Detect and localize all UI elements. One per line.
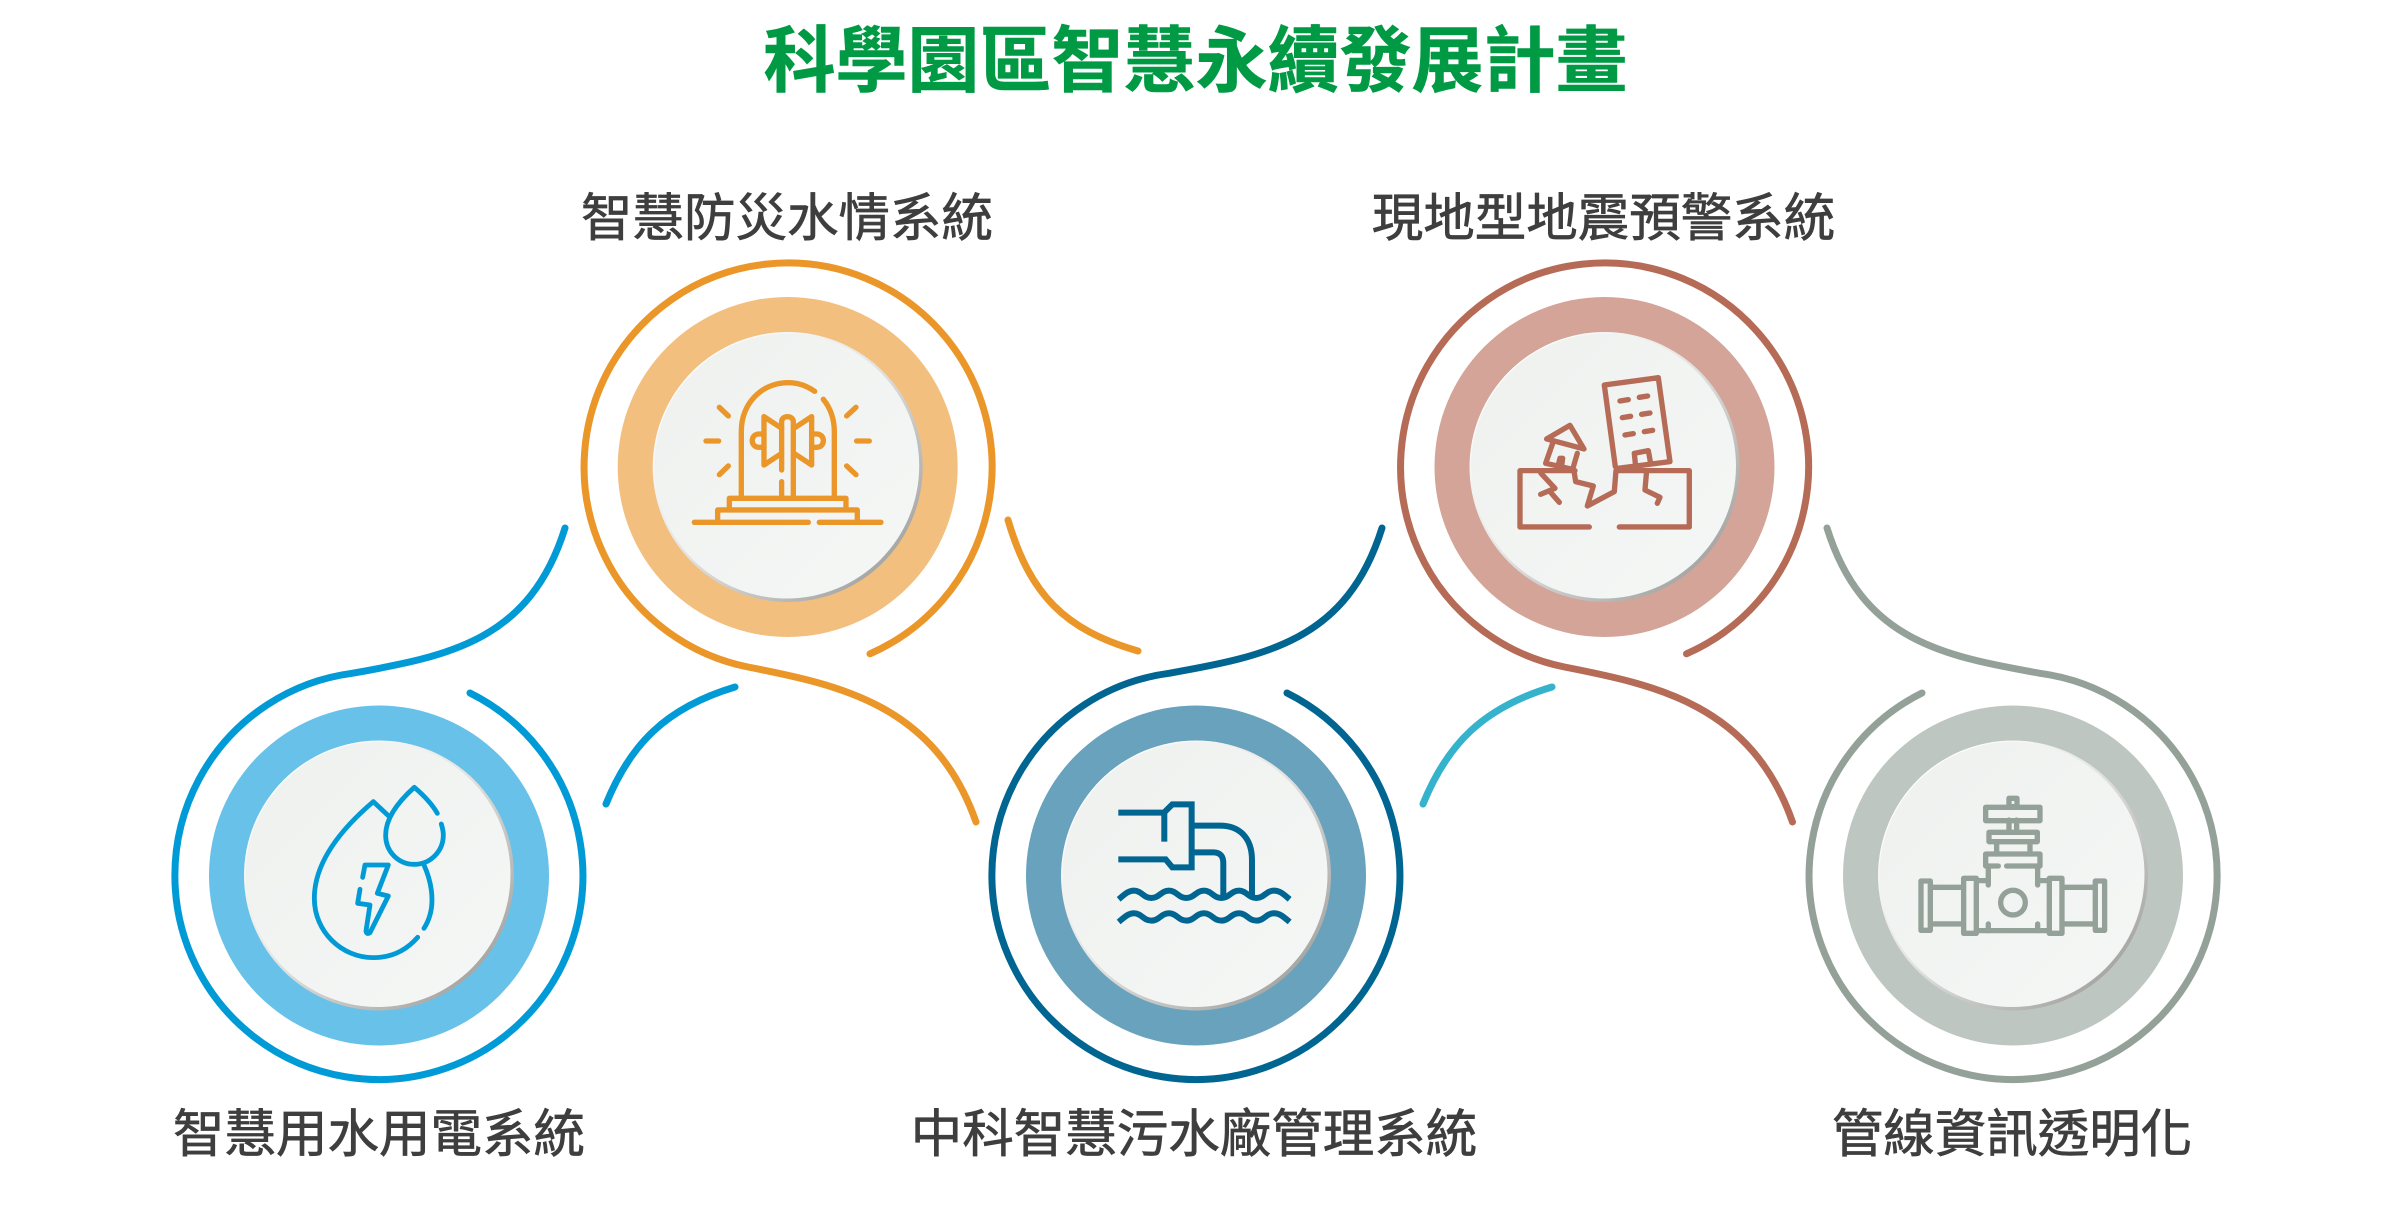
ring: gray (1843, 706, 2183, 1046)
icon: water drop with lightning bolt (314, 787, 443, 958)
disc (1470, 332, 1740, 602)
ring: dark blue (1026, 706, 1366, 1046)
panel: water and power (175, 528, 583, 1080)
connector: small teal arc (1423, 687, 1552, 804)
disc (1061, 740, 1331, 1010)
title: 科學園區智慧永續發展計畫 (763, 22, 1628, 102)
heading: 智慧用水用電系統: 智慧用水用電系統 (173, 1105, 585, 1163)
connector: small orange arc (1008, 520, 1138, 651)
ring: rust (1434, 297, 1774, 637)
connector: small blue arc (606, 687, 735, 804)
icon: pipe valve (1921, 798, 2105, 933)
heading: 智慧防災水情系統: 智慧防災水情系統 (581, 189, 993, 247)
panel: flood alert (584, 263, 992, 822)
outer line: blue (175, 528, 583, 1080)
outer line: dark blue (992, 528, 1400, 1080)
disc (653, 332, 923, 602)
outer line: gray (1809, 528, 2217, 1080)
panel: wastewater (992, 528, 1400, 1080)
panel: earthquake (1401, 263, 1809, 822)
icon: earthquake damaged buildings (1520, 378, 1689, 527)
icon: alarm siren (694, 383, 881, 522)
ring: blue (209, 706, 549, 1046)
icon: discharge pipe over water (1118, 804, 1290, 922)
ring: orange (618, 297, 958, 637)
heading: 管線資訊透明化: 管線資訊透明化 (1832, 1105, 2192, 1163)
outer line: rust (1401, 263, 1809, 822)
heading: 中科智慧污水廠管理系統: 中科智慧污水廠管理系統 (911, 1105, 1477, 1163)
disc (1878, 740, 2148, 1010)
disc (244, 740, 514, 1010)
heading: 現地型地震預警系統: 現地型地震預警系統 (1372, 189, 1835, 247)
panel: pipeline (1809, 528, 2217, 1080)
outer line: orange (584, 263, 992, 822)
